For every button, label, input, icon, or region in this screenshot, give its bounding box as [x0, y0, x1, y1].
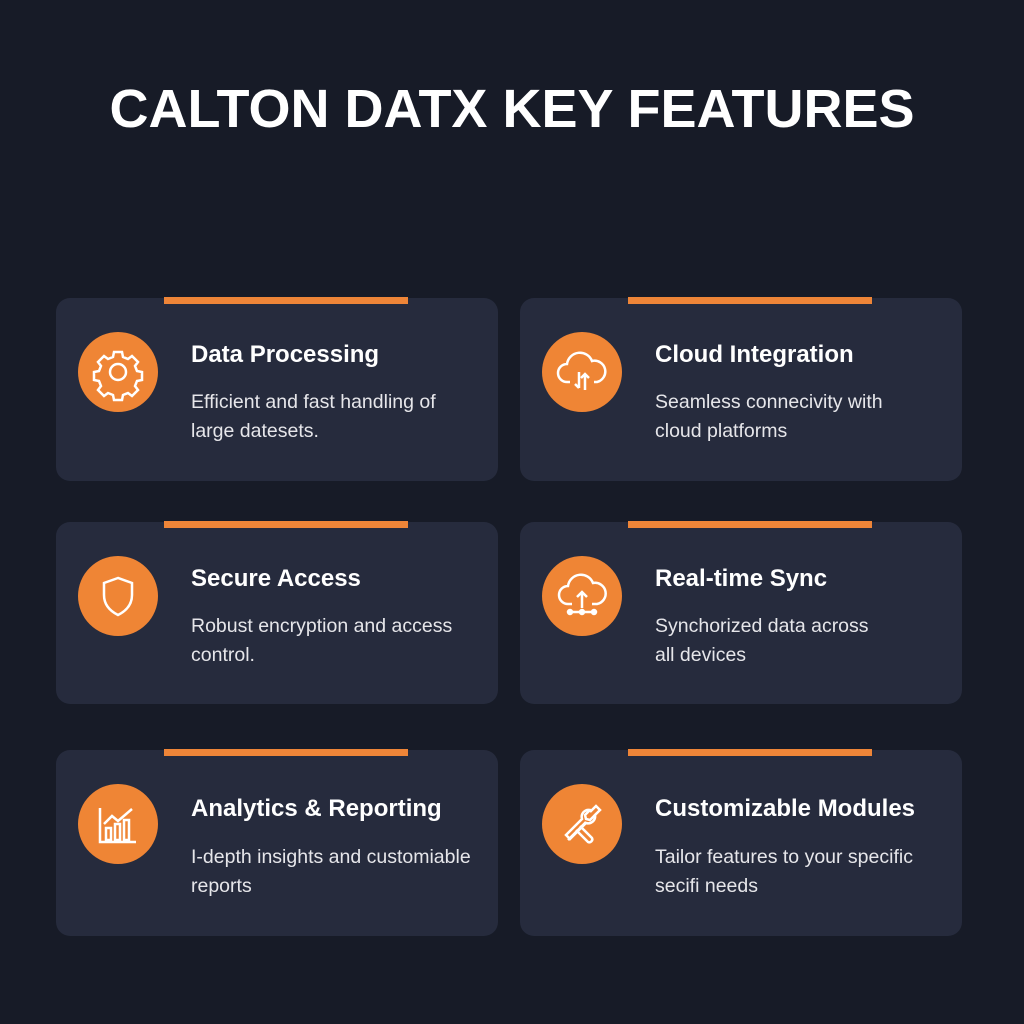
text: Seamless connecivity with [655, 391, 883, 413]
text [655, 615, 869, 666]
panel: secure access [56, 522, 498, 704]
heading: Secure Access [191, 565, 361, 592]
panel: customizable modules [520, 750, 962, 936]
text [191, 391, 436, 442]
panel: data processing [56, 298, 498, 481]
text: secifi needs [655, 875, 758, 897]
text [191, 615, 452, 666]
icon: shield [78, 556, 158, 636]
text: reports [191, 875, 252, 897]
text: cloud platforms [655, 420, 787, 442]
text: Synchorized data across [655, 615, 869, 637]
text: control. [191, 644, 255, 666]
icon: cloud [542, 332, 622, 412]
heading: Cloud Integration [655, 341, 854, 368]
text [655, 846, 913, 897]
text: large datesets. [191, 420, 319, 442]
text: Efficient and fast handling of [191, 391, 436, 413]
text: Robust encryption and access [191, 615, 452, 637]
text [655, 391, 883, 442]
icon: gear [78, 332, 158, 412]
heading: Customizable Modules [655, 795, 915, 822]
text: all devices [655, 644, 746, 666]
heading: Analytics & Reporting [191, 795, 442, 822]
title: CALTON DATX KEY FEATURES [109, 79, 915, 139]
text: Tailor features to your specific [655, 846, 913, 868]
panel: cloud integration [520, 298, 962, 481]
icon: cloud sync [542, 556, 622, 636]
panel: real-time sync [520, 522, 962, 704]
text [191, 846, 471, 897]
icon: tools [542, 784, 622, 864]
heading: Real-time Sync [655, 565, 827, 592]
icon: chart [78, 784, 158, 864]
text: I-depth insights and customiable [191, 846, 471, 868]
heading: Data Processing [191, 341, 379, 368]
panel: analytics [56, 750, 498, 936]
